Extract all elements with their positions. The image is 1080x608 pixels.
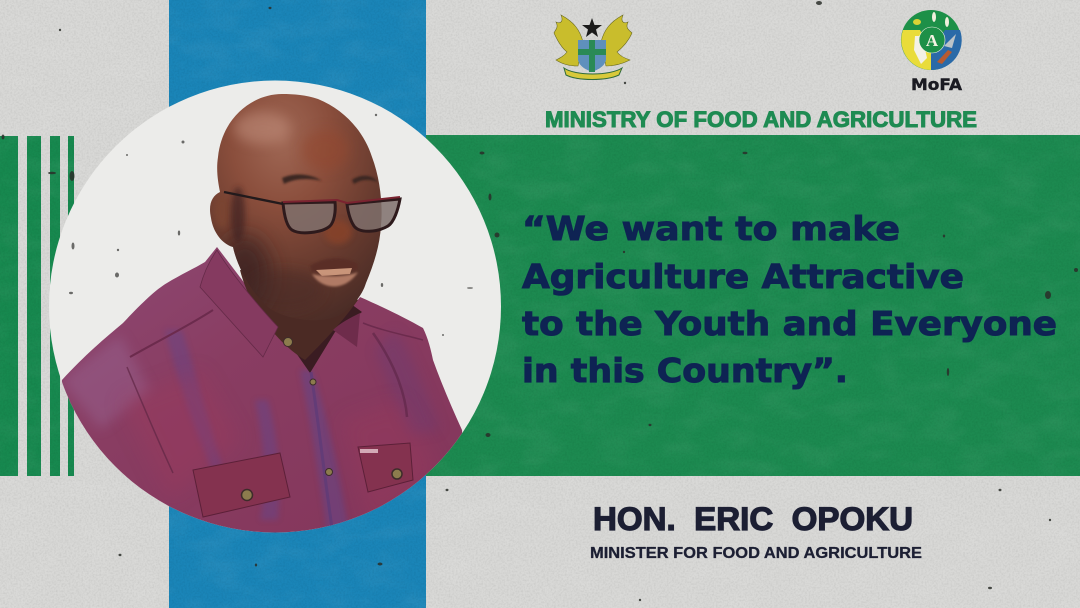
- panel: blue vertical band: [169, 0, 426, 608]
- logo: MoFA: A: [926, 31, 939, 50]
- panel: green quote band: [426, 135, 1080, 476]
- panel: circular portrait: [49, 80, 501, 545]
- left pocket: [193, 453, 290, 517]
- logo: MoFA: [901, 10, 963, 94]
- right pocket: [358, 443, 413, 492]
- golden eagles: [554, 15, 583, 66]
- motto ribbon: [564, 68, 622, 80]
- shirt: [62, 247, 462, 532]
- logo wordmark: MoFA: [911, 75, 963, 94]
- shirt buttons: [284, 338, 332, 476]
- quote text: Agriculture Attractive: [522, 257, 964, 296]
- speaker name: HON. ERIC OPOKU: [593, 501, 913, 537]
- shield: [578, 40, 606, 72]
- green stripes on the left: [0, 136, 74, 476]
- quote text: to the Youth and Everyone: [522, 304, 1057, 343]
- disc speckles: [69, 114, 473, 336]
- glasses: [224, 192, 400, 233]
- portrait figure: [50, 94, 480, 545]
- neck: [240, 270, 358, 360]
- logo circle: [901, 10, 961, 70]
- speaker title: MINISTER FOR FOOD AND AGRICULTURE: [590, 545, 922, 562]
- placket: [311, 372, 333, 535]
- heading: ministry name: MINISTRY OF FOOD AND AGRICULTURE: [545, 107, 977, 132]
- logo: Ghana coat of arms: [554, 15, 632, 80]
- portrait disc: [49, 80, 501, 532]
- quote text: “We want to make: [522, 209, 900, 248]
- dark neck opening: [297, 306, 362, 373]
- black star: [582, 18, 602, 37]
- quote text: [522, 209, 1057, 390]
- left collar: [200, 250, 278, 357]
- right collar: [333, 313, 360, 347]
- head: [210, 94, 382, 320]
- quote text: in this Country”.: [522, 351, 848, 390]
